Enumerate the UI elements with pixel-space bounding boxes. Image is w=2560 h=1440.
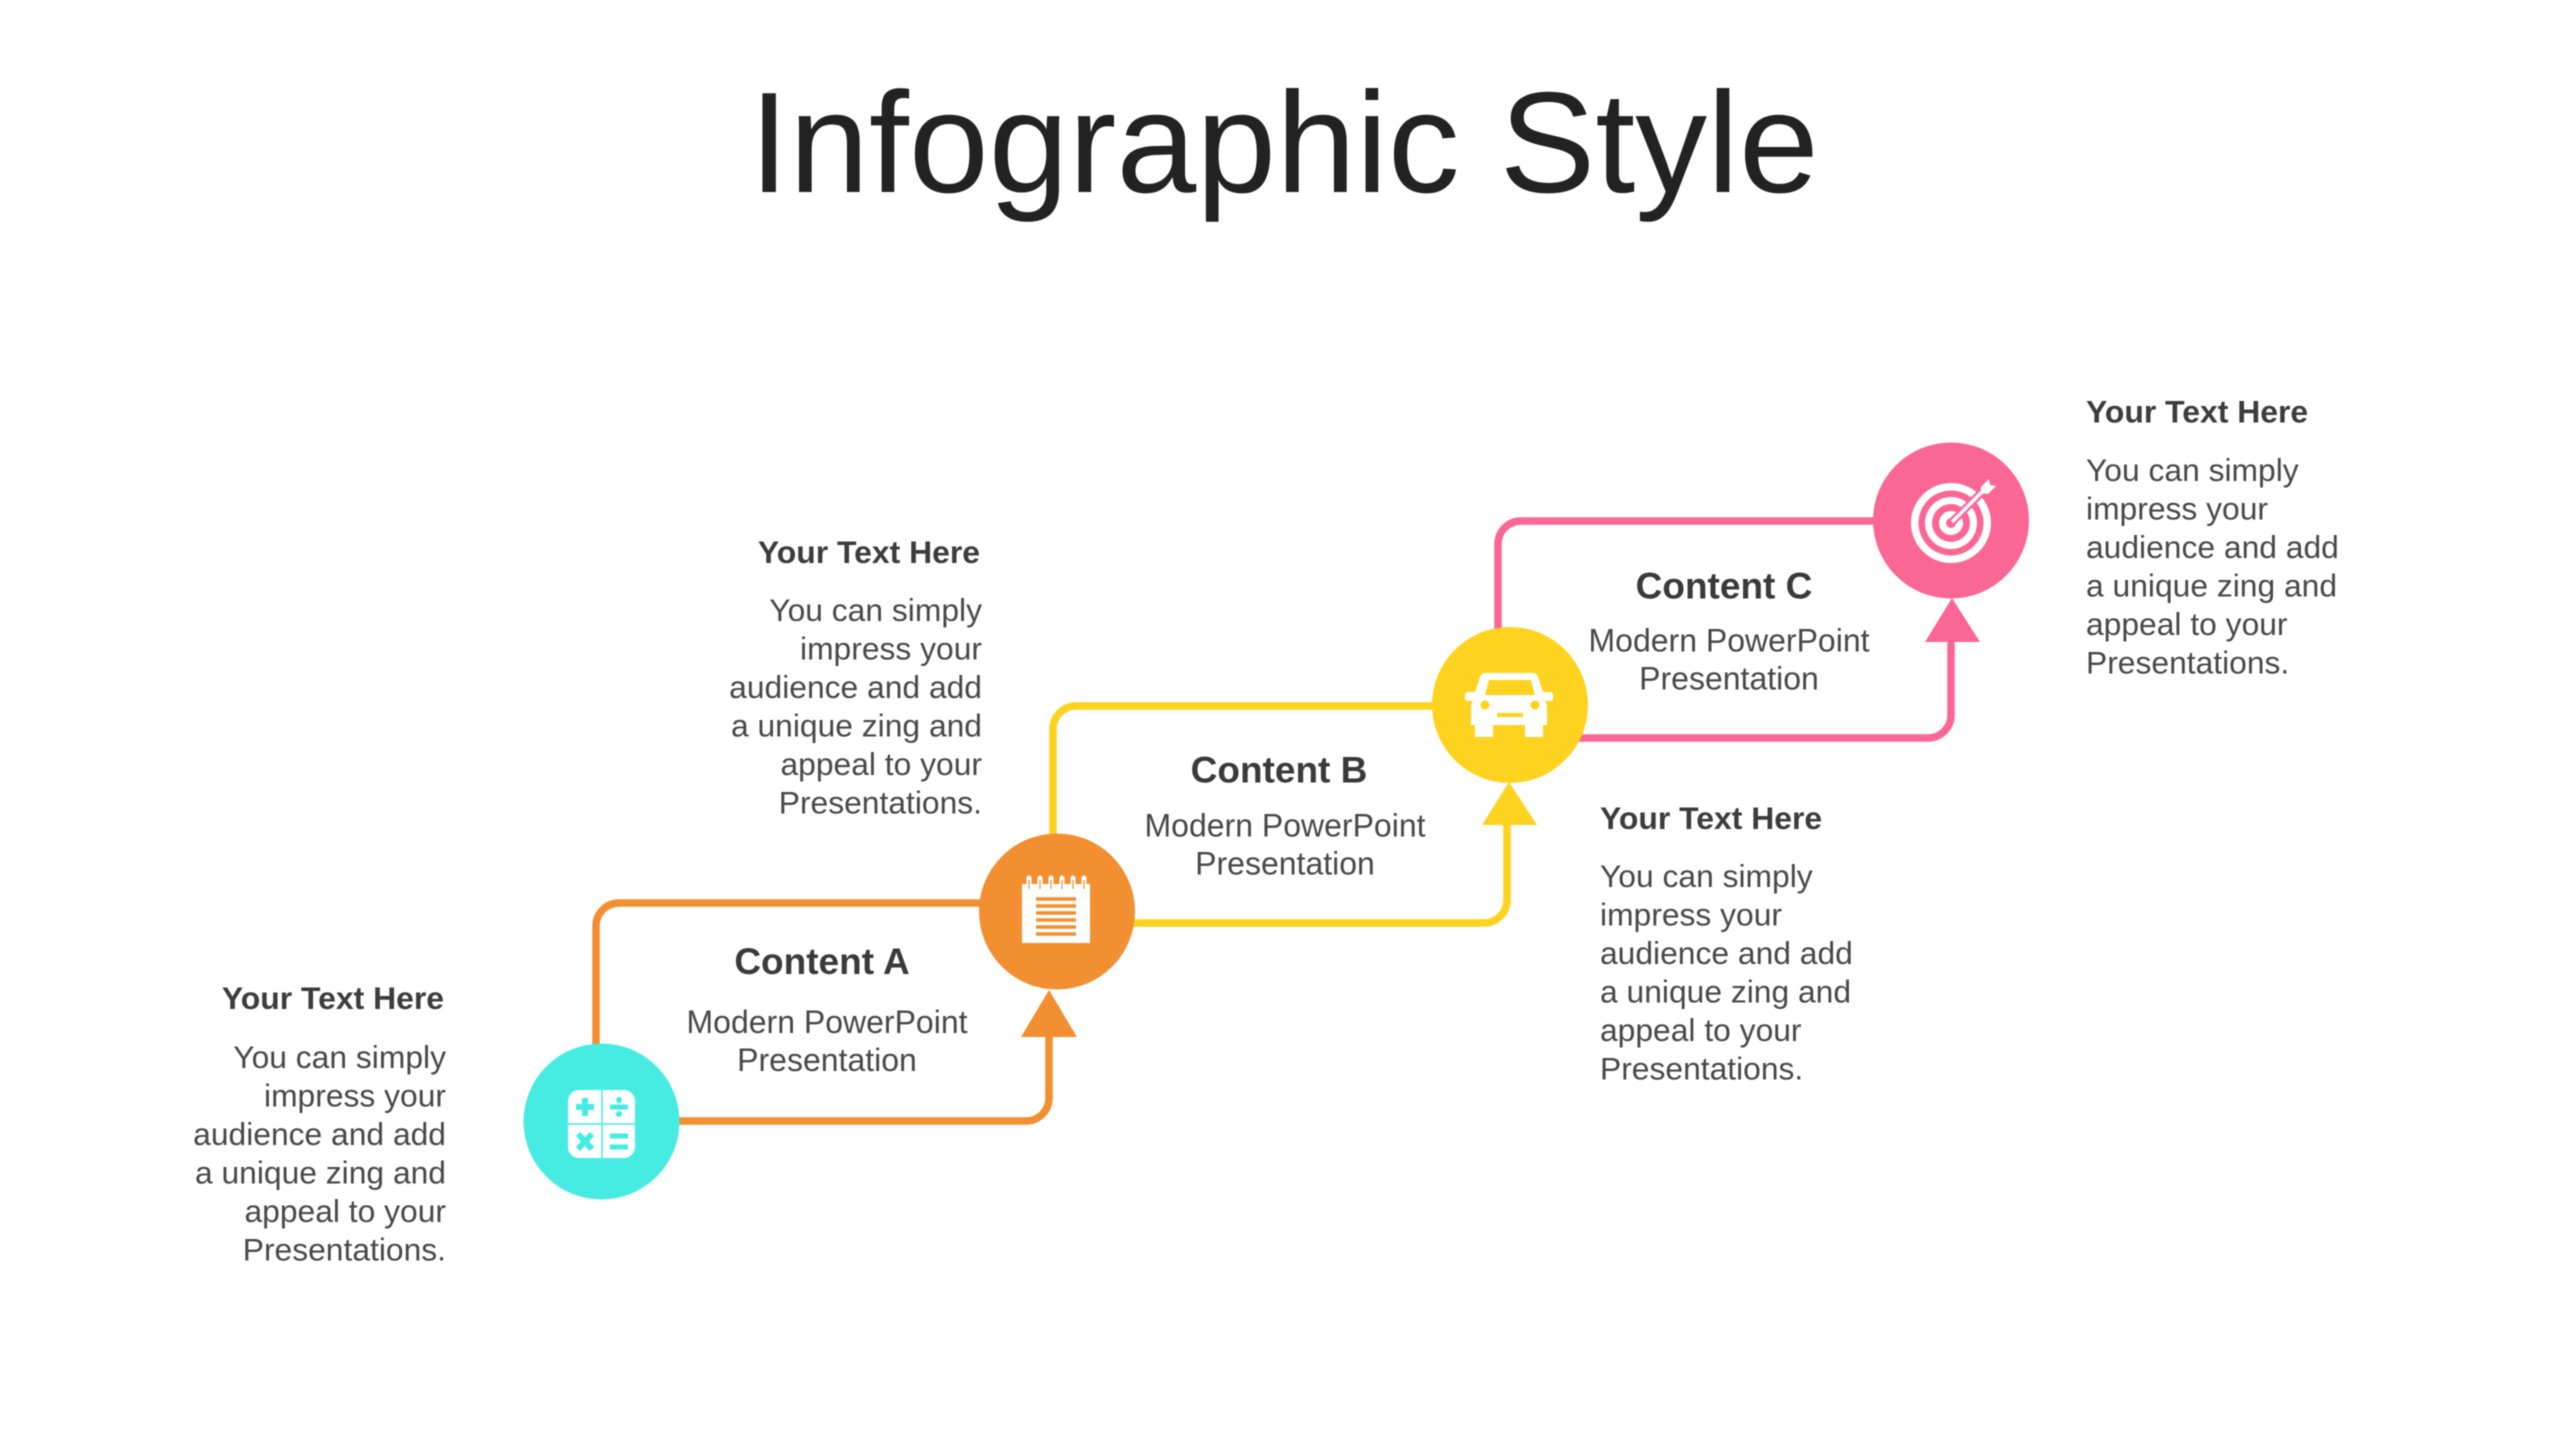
icon: car — [1465, 673, 1553, 737]
text block 1: appeal to your — [244, 1193, 446, 1229]
label: Content C: Content C — [1636, 566, 1812, 606]
icon: target — [1911, 479, 1996, 563]
label: Content C: Presentation — [1639, 660, 1819, 696]
text block 1: You can simply — [233, 1039, 446, 1075]
text block 2: You can simply — [769, 592, 982, 628]
text block 3: audience and add — [1600, 935, 1853, 971]
text block 3 — [1600, 800, 1853, 1086]
text block 4: Your Text Here — [2086, 394, 2308, 430]
node: car — [1432, 627, 1588, 783]
label: Content B: Modern PowerPoint — [1144, 808, 1426, 844]
text block 4: impress your — [2086, 490, 2268, 526]
text block 1: Presentations. — [243, 1232, 446, 1268]
text block 2: impress your — [800, 630, 982, 666]
node: calculator — [524, 1044, 680, 1200]
label: Content A: Presentation — [737, 1042, 917, 1078]
text block 1: Your Text Here — [222, 980, 444, 1016]
text block 1: a unique zing and — [195, 1154, 446, 1190]
text block 3: a unique zing and — [1600, 974, 1851, 1010]
text block 3: Presentations. — [1600, 1050, 1803, 1086]
connector B: yellow — [1053, 706, 1537, 923]
label: Content B: Presentation — [1195, 846, 1375, 882]
label: Content C — [1588, 566, 1870, 696]
text block 3: impress your — [1600, 896, 1782, 932]
text block 3: appeal to your — [1600, 1012, 1802, 1048]
text block 2: a unique zing and — [731, 708, 982, 744]
text block 3: You can simply — [1600, 858, 1813, 894]
label: Content C: Modern PowerPoint — [1588, 622, 1870, 658]
text block 2: Your Text Here — [758, 534, 980, 570]
text block 4: a unique zing and — [2086, 568, 2337, 604]
label: Content A — [686, 941, 968, 1078]
text block 4: You can simply — [2086, 452, 2299, 488]
label: Content B — [1144, 750, 1426, 882]
text block 2 — [729, 534, 982, 820]
title: Infographic Style — [749, 63, 1819, 223]
text block 1: audience and add — [193, 1116, 446, 1152]
text block 4: appeal to your — [2086, 606, 2288, 642]
connector A: orange — [596, 903, 1077, 1121]
text block 2: audience and add — [729, 669, 982, 705]
node: notepad — [979, 834, 1135, 990]
label: Content A: Content A — [734, 941, 910, 982]
text block 4 — [2086, 394, 2339, 680]
text block 4: audience and add — [2086, 529, 2339, 565]
icon: calculator — [568, 1090, 635, 1158]
text block 2: Presentations. — [779, 784, 982, 820]
node: target — [1873, 442, 2029, 598]
label: Content A: Modern PowerPoint — [686, 1004, 968, 1040]
icon: notepad — [1022, 878, 1090, 943]
text block 2: appeal to your — [780, 746, 982, 782]
text block 4: Presentations. — [2086, 644, 2289, 680]
connector C: pink — [1498, 521, 1980, 738]
text block 3: Your Text Here — [1600, 800, 1822, 836]
text block 1: impress your — [264, 1078, 446, 1114]
label: Content B: Content B — [1191, 750, 1367, 790]
text block 1 — [193, 980, 446, 1268]
